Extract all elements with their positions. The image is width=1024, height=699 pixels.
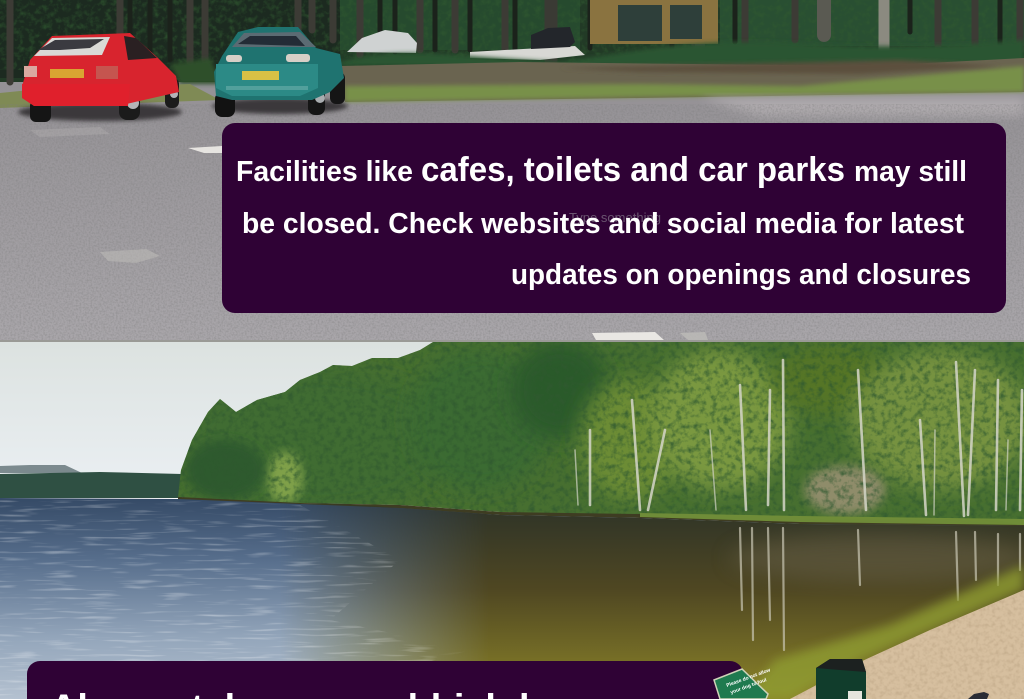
shrubs xyxy=(170,40,1024,84)
white background cars and path xyxy=(347,27,585,60)
asphalt texture xyxy=(0,104,1024,340)
notice text: may still xyxy=(854,156,967,188)
divider strip xyxy=(0,340,1024,342)
far tree line xyxy=(0,472,182,498)
ripples xyxy=(0,500,480,699)
shoreline xyxy=(178,497,1024,527)
dog silhouette xyxy=(968,692,989,699)
sandy beach xyxy=(790,590,1024,699)
ghost placeholder text: Type something xyxy=(569,210,661,225)
photo: car park xyxy=(0,0,1024,340)
sky xyxy=(0,342,1024,477)
grass and soil verge xyxy=(0,58,1024,116)
forest xyxy=(170,340,1024,527)
red car xyxy=(18,33,182,122)
panel background xyxy=(222,123,1006,313)
forest colour in the reflection xyxy=(730,534,1024,582)
wooden hut xyxy=(590,0,718,44)
sign: green information plate: your dog to foul xyxy=(730,677,768,696)
notice text xyxy=(236,151,971,291)
notice text: Facilities like xyxy=(236,156,413,188)
water xyxy=(0,498,1024,699)
sign: green information plate xyxy=(714,667,771,699)
notice text: be closed. Check websites and social media for latest xyxy=(242,208,964,240)
sign: green information plate: Please do not allow xyxy=(726,667,771,689)
road markings xyxy=(30,127,708,340)
panel background xyxy=(27,661,743,699)
tree reflections xyxy=(740,528,1020,650)
sun-lit shallows xyxy=(745,565,1024,699)
birch trunks xyxy=(575,360,1022,516)
distant hill xyxy=(0,465,82,473)
notice text: cafes, toilets and car parks xyxy=(421,151,845,189)
dog bin xyxy=(816,659,866,699)
photo: loch and forest xyxy=(0,340,1024,699)
teal car xyxy=(212,27,348,117)
notice text: updates on openings and closures xyxy=(511,259,971,291)
panel: facilities notice xyxy=(222,123,1006,313)
forest background xyxy=(0,0,1024,82)
panel: rubbish notice xyxy=(27,661,743,699)
